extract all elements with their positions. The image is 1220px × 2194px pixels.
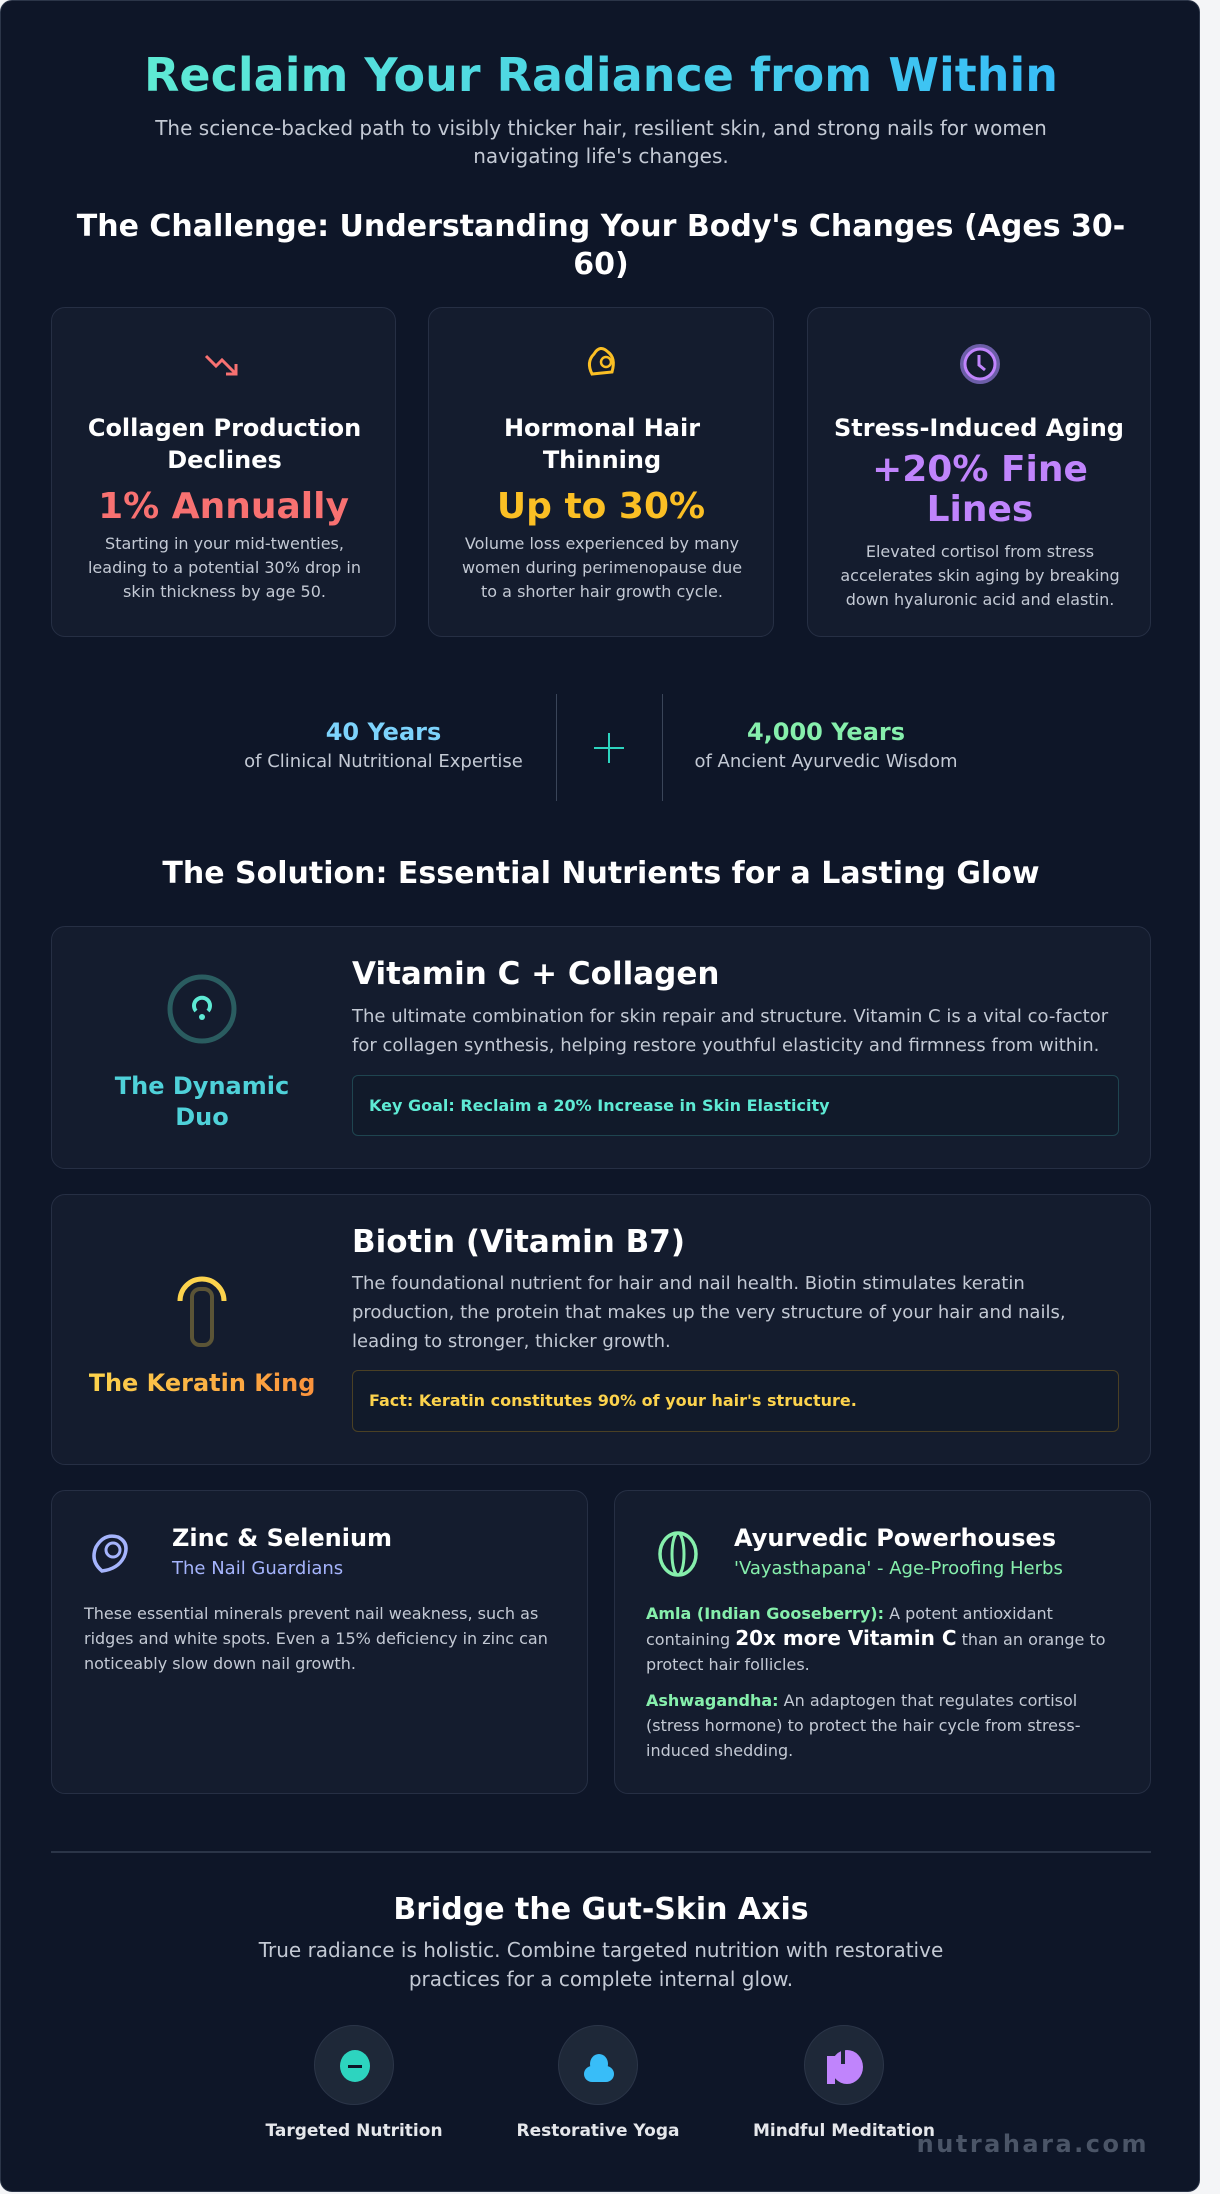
practice: meditation: Mindful Meditation — [753, 2121, 935, 2141]
panel: collagen — [51, 307, 396, 637]
icon: nutrition — [314, 2025, 394, 2105]
label — [114, 1072, 289, 1131]
callout: Fact: Keratin constitutes 90% of your hair's structure. — [369, 1391, 857, 1410]
text block: True radiance is holistic. Combine targeted nutrition with restorative practices for a complete internal glow. — [259, 1938, 943, 1991]
panel: hair thinning — [428, 307, 774, 637]
title: Ayurvedic Powerhouses — [734, 1524, 1056, 1552]
stat: 1% Annually — [98, 486, 349, 527]
text: amla: Amla (Indian Gooseberry): A potent antioxidant containing 20x more Vitamin C than an orange to protect hair follicles. — [646, 1604, 1106, 1674]
heritage: clinical: of Clinical Nutritional Expertise — [244, 751, 523, 772]
card title: Stress-Induced Aging — [834, 414, 1124, 442]
subtitle: 'Vayasthapana' - Age-Proofing Herbs — [734, 1558, 1063, 1579]
panel: ayurvedic — [614, 1490, 1151, 1794]
heading: challenge: The Challenge: Understanding Your Body's Changes (Ages 30-60) — [77, 209, 1125, 282]
panel: zinc — [51, 1490, 588, 1794]
title: Zinc & Selenium — [172, 1524, 392, 1552]
practice: nutrition — [265, 2025, 443, 2141]
heritage: clinical — [244, 718, 523, 772]
icon: clock — [960, 344, 1000, 384]
description: Volume loss experienced by many women during perimenopause due to a shorter hair growth cycle. — [462, 534, 742, 601]
subtitle: The science-backed path to visibly thicker hair, resilient skin, and strong nails for women navigating life's changes. — [155, 116, 1047, 168]
panel: stress — [807, 307, 1151, 637]
icon: meditation — [804, 2025, 884, 2105]
icon: plus — [594, 733, 624, 763]
watermark: nutrahara.com — [917, 2130, 1149, 2158]
icon: trending down — [205, 355, 238, 376]
description: These essential minerals prevent nail weakness, such as ridges and white spots. Even a 15% deficiency in zinc can noticeably slow down nail growth. — [84, 1604, 548, 1673]
icon: hair — [588, 347, 615, 376]
heritage: ayurvedic: of Ancient Ayurvedic Wisdom — [694, 751, 958, 772]
description: Starting in your mid-twenties, leading to a potential 30% drop in skin thickness by age 50. — [88, 534, 361, 601]
heading: solution: The Solution: Essential Nutrients for a Lasting Glow — [162, 856, 1040, 891]
heritage: clinical: 40 Years — [326, 718, 441, 746]
callout — [352, 1075, 1119, 1136]
description: Elevated cortisol from stress accelerates skin aging by breaking down hyaluronic acid and elastin. — [840, 542, 1120, 609]
label: The Keratin King — [89, 1369, 315, 1397]
stat: Up to 30% — [497, 486, 705, 527]
title: Reclaim Your Radiance from Within — [144, 48, 1058, 102]
practice: meditation — [753, 2025, 935, 2141]
icon: keratin — [178, 1276, 226, 1347]
title: Biotin (Vitamin B7) — [352, 1224, 685, 1260]
card title: Hormonal Hair Thinning — [504, 414, 700, 474]
callout — [352, 1370, 1119, 1432]
heritage: ayurvedic — [694, 718, 958, 772]
panel: vitamin c — [51, 926, 1151, 1169]
heading: gut-skin: Bridge the Gut-Skin Axis — [393, 1892, 809, 1927]
practice: yoga — [517, 2025, 679, 2141]
icon: nail — [92, 1534, 128, 1573]
icon: leaf — [658, 1531, 698, 1577]
text: ashwagandha: Ashwagandha: An adaptogen that regulates cortisol (stress hormone) to protect the hair cycle from stress-induced shedding. — [646, 1691, 1080, 1760]
callout: Key Goal: Reclaim a 20% Increase in Skin Elasticity — [369, 1096, 830, 1115]
icon: dynamic duo — [168, 974, 236, 1044]
subtitle: The Nail Guardians — [172, 1558, 343, 1579]
label: Duo — [175, 1103, 229, 1131]
description: The ultimate combination for skin repair and structure. Vitamin C is a vital co-factor for collagen synthesis, helping restore youthful elasticity and firmness from within. — [352, 1006, 1108, 1056]
title: Vitamin C + Collagen — [352, 956, 719, 992]
panel: biotin — [51, 1194, 1151, 1465]
practice: yoga: Restorative Yoga — [517, 2121, 679, 2141]
heritage: ayurvedic: 4,000 Years — [747, 718, 905, 746]
practice: nutrition: Targeted Nutrition — [265, 2121, 443, 2141]
icon: yoga — [558, 2025, 638, 2105]
description: The foundational nutrient for hair and nail health. Biotin stimulates keratin production, the protein that makes up the very structure of your hair and nails, leading to stronger, thicker growth. — [352, 1273, 1066, 1352]
card title: Collagen Production Declines — [88, 414, 361, 474]
stat: +20% Fine Lines — [872, 449, 1088, 530]
label: The Dynamic — [115, 1072, 289, 1100]
